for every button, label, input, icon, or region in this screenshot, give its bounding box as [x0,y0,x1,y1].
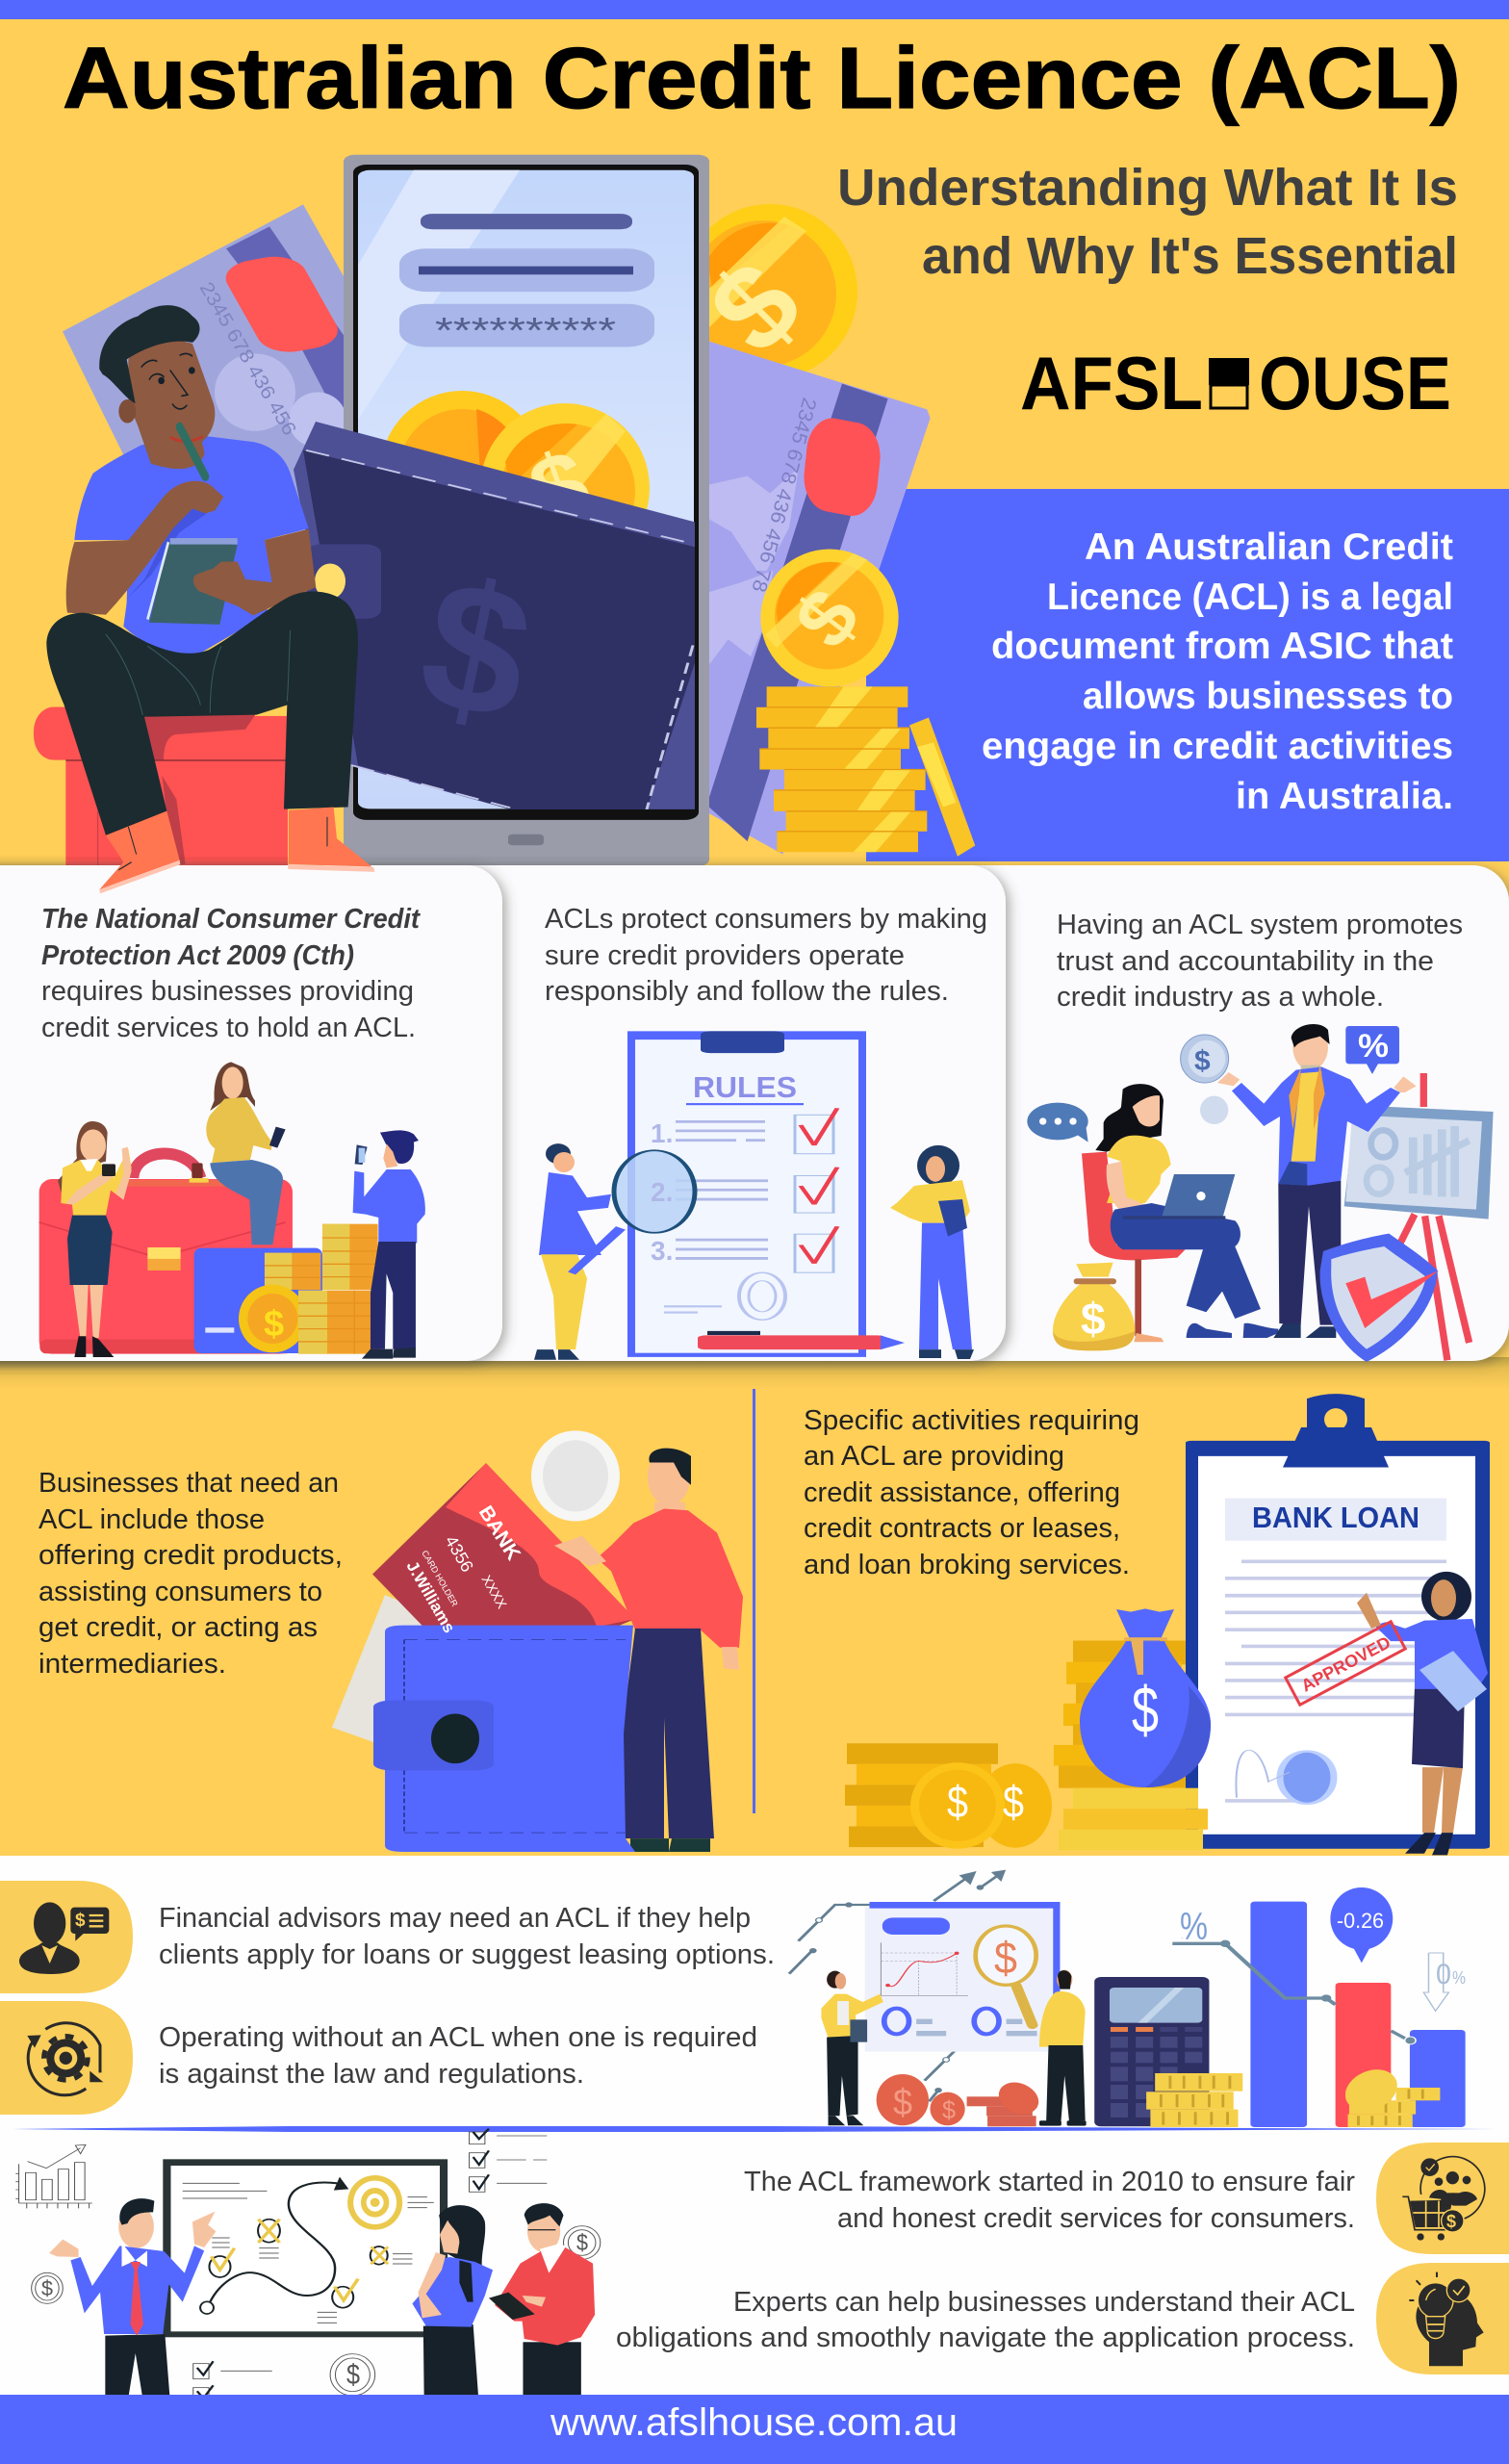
icon: pencil [698,1331,905,1349]
text: businesses that need an ACL: Businesses that need an [38,1468,339,1499]
card details text: 4356 [442,1532,477,1576]
icon: blue box and coins [194,1224,378,1354]
phone password asterisks: ********** [435,311,616,351]
illustration: business people with briefcase [39,1062,425,1359]
icon: checklist top [470,2129,547,2192]
coin dollar signs: $ [576,2230,588,2256]
panel: ACL definition [866,489,1509,861]
zero percent label: 0 [1436,1959,1451,1990]
icon pill: expert head with bulb [1376,2263,1509,2374]
raised arm [66,481,223,615]
subtitle: and Why It's Essential [922,227,1458,285]
text: experts can help: obligations and smoothly navigate the application process. [616,2323,1355,2353]
man looking at phone [353,1130,425,1359]
card 3 text: credit industry as a whole. [1057,982,1384,1013]
panel: ACL definition: document from ASIC that [991,626,1453,667]
card 1 text: requires businesses providing [41,976,414,1007]
trend arrows [789,1870,1039,2101]
woman sitting on briefcase [206,1062,286,1245]
icon: coins in wallet: $ [516,428,603,548]
shirt [74,436,309,654]
panel: ACL definition: Licence (ACL) is a legal [1047,577,1453,618]
panel: card 3 trust [0,865,1509,1361]
text: businesses that need an ACL: ACL include those [38,1504,265,1535]
icon: right credit card [707,341,931,854]
percent underline decoration [1182,1937,1183,1939]
icon: gold stacks foreground [845,1743,1208,1850]
coin dollars [947,1777,1024,1827]
head [99,305,215,469]
card 1 text: credit services to hold an ACL. [41,1013,416,1043]
approved stamp: APPROVED [1298,1632,1394,1696]
divider line [12,2126,1496,2132]
text: specific activities [804,1405,1139,1580]
icon: red credit card [372,1463,635,1627]
text: financial advisors: clients apply for loans or suggest leasing options. [159,1939,775,1970]
approved stamp [1286,1622,1405,1705]
text: ACL framework: and honest credit services for consumers. [837,2203,1355,2234]
woman with folder [890,1145,974,1359]
footer band [0,2395,1509,2464]
person's boots [99,808,374,893]
woman at board [821,1971,883,2125]
man with magnifier [534,1143,695,1360]
woman at laptop in chair [1082,1084,1278,1342]
panel: ACL definition: engage in credit activities [982,726,1453,767]
icon: blue wallet [373,1626,635,1852]
icon: clipboard bank loan [1186,1394,1490,1849]
card 2 text: ACLs protect consumers by making [545,904,987,935]
card 1 text [41,904,421,1043]
notebook [147,538,238,625]
bag dollar: $ [1132,1674,1159,1747]
icon pill: consumers cart: $ [1446,2212,1456,2231]
arm shadow [127,497,218,599]
wallet dollar sign: $ [405,540,547,760]
logo: AFSL House: AFSL [1020,341,1203,425]
percent symbol: % [1358,1028,1389,1065]
panel: ACL definition: in Australia. [1236,776,1453,817]
card details text: BANK [474,1502,524,1564]
card 3 dollars: $ [1194,1045,1211,1077]
card 2 text [545,904,987,1007]
text: businesses that need an ACL: offering credit products, [38,1540,343,1571]
woman thinking [412,2205,493,2395]
icon: checklist bottom [193,2361,272,2400]
icon pill: financial advisor [0,1881,133,1993]
website url: www.afslhouse.com.au [550,2401,958,2444]
card 3 text [1057,910,1463,1013]
BANK LOAN heading: BANK LOAN [1252,1501,1419,1534]
text: specific activities: credit contracts or leases, [804,1513,1120,1544]
value bubble [1330,1887,1393,1963]
value label: -0.26 [1337,1909,1384,1933]
icon: left credit card [63,204,356,552]
bearded man [1039,1970,1087,2126]
illustration: financial analysis with bars [789,1870,1466,2127]
card details text: CARD HOLDER [420,1549,460,1608]
red coin dollars [893,2083,957,2124]
card 1 text: The National Consumer Credit [41,904,421,935]
holding arm [193,529,316,615]
title: Australian Credit Licence (ACL) [63,31,1461,127]
woman with phone [58,1121,132,1357]
text: experts can help [616,2287,1355,2353]
text: operating without ACL: Operating without an ACL when one is required [159,2022,757,2053]
icon pill: compliance gear [0,2001,133,2115]
zero percent label: % [1452,1968,1466,1988]
percent label: % [1180,1906,1208,1948]
card number: 2345 678 436 456 78 [747,396,820,595]
icon: easel board [1344,1073,1494,1360]
man presenting [1217,1024,1417,1338]
icons: dollar coins [32,2226,601,2396]
icon: gold stacks behind bag [1054,1641,1193,1788]
man presenting [49,2198,216,2395]
rule numbers: 2. [651,1177,673,1207]
coin dollar signs: $ [778,573,878,664]
text: businesses that need an ACL: intermediaries. [38,1649,226,1680]
red coin dollars: $ [942,2095,957,2124]
magnifier dollar: $ [994,1933,1017,1983]
icon: briefcase [39,1153,293,1354]
text: financial advisors [159,1903,775,1970]
icon pill: financial advisor: $ [75,1911,86,1931]
card details text [403,1502,524,1636]
woman presenting [1357,1572,1488,1855]
icon: strategy board [163,2159,448,2337]
icon: left credit card: 2345 678 436 456 [195,279,300,439]
icon pill: consumers cart [1376,2143,1509,2254]
text: businesses that need an ACL: assisting consumers to [38,1577,322,1607]
bar chart [1172,1902,1466,2127]
card 3 dollars: $ [1081,1294,1106,1344]
icon: chat bubble [1027,1103,1088,1142]
RULES heading: RULES [693,1070,797,1104]
man in red shirt [554,1449,743,1852]
illustration: team with laptop and board [1027,1024,1494,1362]
icon: mini chart [15,2144,92,2208]
logo: AFSL House [1020,341,1451,425]
text: businesses that need an ACL: get credit, or acting as [38,1612,318,1643]
text: specific activities: and loan broking services. [804,1550,1130,1580]
text: specific activities: Specific activities requiring [804,1405,1139,1436]
icon: clipboard [627,1031,866,1357]
icon: red coins [877,2074,1046,2126]
card 1 text: Protection Act 2009 (Cth) [41,940,354,971]
panel: ACL definition: allows businesses to [1083,676,1453,717]
trousers [46,591,358,835]
text: specific activities: an ACL are providing [804,1441,1064,1472]
coin dollar signs [41,2230,588,2391]
text: financial advisors: Financial advisors may need an ACL if they help [159,1903,751,1934]
icon: back coin: $ [684,236,827,378]
rule numbers [651,1118,673,1266]
card details text: J.Williams [403,1557,458,1636]
card 2 text: responsibly and follow the rules. [545,976,949,1007]
icon: chart board [865,1902,1060,2052]
icon: shield [1320,1234,1439,1362]
icon: coin stack [756,550,975,857]
illustration: bank loan clipboard and money [845,1394,1490,1855]
icon: coins floating [1181,1035,1229,1124]
panel: card 1 national act [0,865,502,1361]
card 2 text: sure credit providers operate [545,940,905,971]
vertical divider [753,1389,755,1813]
stool [34,707,288,866]
icon: silver card [332,1595,428,1753]
coin dollar sign: $ [264,1304,284,1345]
illustration: rules clipboard [534,1031,974,1360]
lower white section [0,1856,1509,2395]
card 3 text: Having an ACL system promotes [1057,910,1463,940]
card 3 dollars [1081,1045,1211,1344]
text: experts can help: Experts can help businesses understand their ACL [733,2287,1355,2318]
text: ACL framework [744,2167,1355,2234]
panel: ACL definition: An Australian Credit [1085,526,1453,568]
hero illustration [34,155,975,866]
card 3 text: trust and accountability in the [1057,946,1434,977]
illustration: man with wallet and card [332,1430,743,1852]
icon: gold stacks [1146,2073,1242,2127]
zero percent label [1436,1959,1466,1990]
rule numbers: 1. [651,1118,673,1148]
coin dollar signs: $ [346,2359,360,2391]
text: operating without ACL [159,2022,757,2090]
icon: down arrow [1423,1953,1448,2011]
card shadow strip [0,1357,1509,1390]
coin dollars: $ [947,1777,968,1827]
icon: money bag [1053,1263,1135,1350]
subtitle [837,159,1458,285]
text: businesses that need an ACL [38,1468,343,1680]
icon: coins in wallet [380,391,650,573]
coin dollar signs: $ [41,2276,53,2300]
red coin dollars: $ [893,2083,912,2123]
icon: back coin [682,204,857,379]
top band [0,0,1509,19]
coin dollars: $ [1003,1777,1024,1827]
rule numbers: 3. [651,1236,673,1266]
pen [180,427,205,476]
text: operating without ACL: is against the law and regulations. [159,2059,584,2090]
icon: phone [344,155,709,866]
icon: calculator [1094,1977,1209,2126]
text: specific activities: credit assistance, offering [804,1477,1120,1508]
text: ACL framework: The ACL framework started in 2010 to ensure fair [744,2167,1355,2197]
icon: silver coin [531,1430,620,1521]
card details text: XXXX [478,1573,510,1611]
person thinking on a stool [34,305,358,866]
icon: money bag [1080,1608,1211,1787]
panel: card 2 consumers [0,865,1006,1361]
illustration: team planning strategy board [15,2129,601,2400]
subtitle: Understanding What It Is [837,159,1458,217]
icon: wallet [294,422,695,809]
logo: AFSL House: OUSE [1259,341,1451,425]
man with tablet [489,2203,595,2395]
icon: percent tag [1345,1026,1399,1074]
